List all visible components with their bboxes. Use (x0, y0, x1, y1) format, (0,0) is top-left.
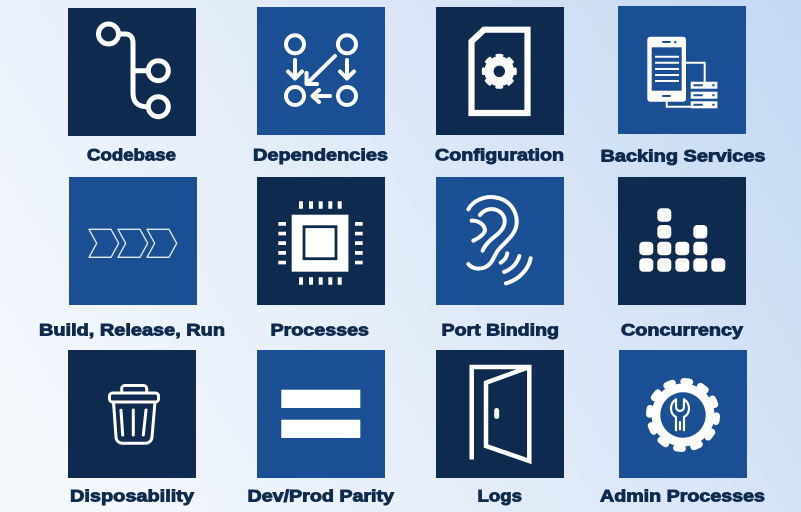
card: Concurrency (618, 177, 746, 340)
label: Dependencies: Dependencies (253, 146, 388, 164)
label: Admin Processes: Admin Processes (600, 486, 765, 506)
icon: gear with wrench (646, 378, 720, 452)
label: Codebase: Codebase (87, 146, 176, 164)
card: Disposability (68, 350, 196, 506)
card: Configuration (435, 7, 564, 164)
card: Dependencies (253, 7, 388, 164)
icon: phone connected to servers (647, 37, 717, 108)
label: Disposability: Disposability (70, 486, 195, 506)
label: Build, Release, Run: Build, Release, Run (39, 320, 225, 340)
label: Configuration: Configuration (435, 146, 564, 164)
label: Backing Services: Backing Services (600, 146, 766, 166)
icon: config file with gear (472, 30, 528, 113)
card: Processes (257, 177, 385, 340)
label: Logs: Logs (478, 486, 522, 506)
icon: open door (472, 367, 529, 461)
icon: dot histogram (639, 208, 725, 272)
card: Codebase (68, 8, 196, 164)
card: Backing Services (600, 6, 766, 166)
icon: branching tree (98, 24, 168, 117)
icon: equals sign (281, 390, 360, 438)
icon: three chevrons (89, 229, 177, 257)
card: Logs (436, 350, 564, 506)
icon: trash can (110, 386, 158, 443)
label: Processes: Processes (270, 320, 369, 340)
card: Dev/Prod Parity (248, 350, 395, 506)
card: Admin Processes (600, 350, 765, 506)
label: Dev/Prod Parity: Dev/Prod Parity (248, 486, 395, 506)
icon: dependency graph (286, 35, 356, 105)
card: Build, Release, Run (39, 177, 225, 340)
label: Concurrency: Concurrency (621, 320, 744, 340)
label: Port Binding: Port Binding (442, 320, 559, 340)
card: Port Binding (436, 177, 564, 340)
icon: processor chip (278, 201, 363, 285)
icon: ear with sound waves (468, 197, 531, 283)
